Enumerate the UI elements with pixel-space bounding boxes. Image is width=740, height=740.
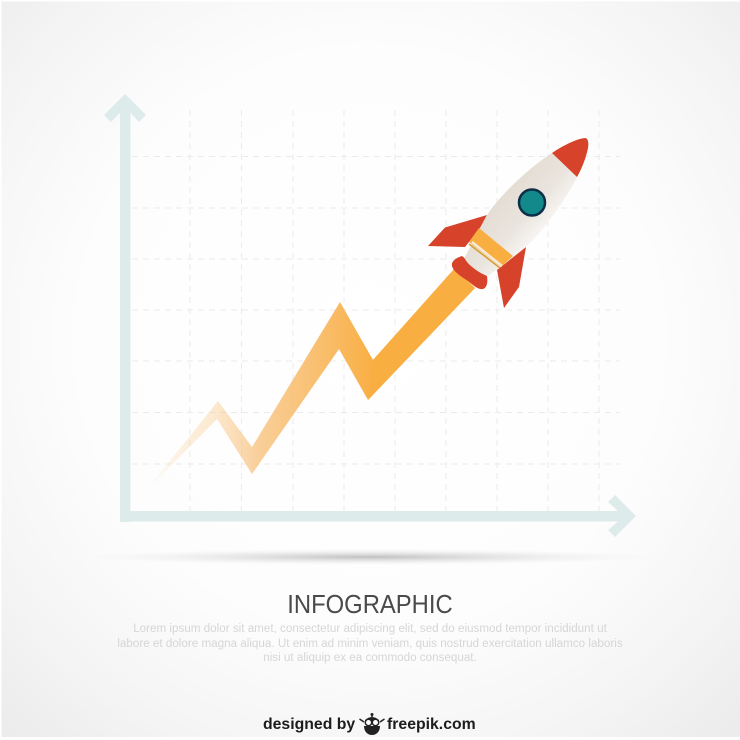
icon: freepik logo [359,713,385,735]
rocket left fin [428,215,487,247]
floor shadow [85,549,655,565]
body text: nisi ut aliquip ex ea commodo consequat. [263,651,477,664]
y axis arrow [104,94,146,522]
body text: labore et dolore magna aliqua. Ut enim ad minim veniam, quis nostrud exercitation ullamco laboris [117,637,623,650]
title: INFOGRAPHIC [287,589,453,619]
rocket nose cone [552,138,588,177]
body text: Lorem ipsum dolor sit amet, consectetur adipiscing elit, sed do eiusmod tempor incididunt ut [133,622,607,635]
chart grid [132,110,620,511]
zigzag growth line [145,268,475,492]
rocket band [469,228,513,267]
rocket [428,138,588,308]
rocket band stripes [469,242,502,268]
rocket window [519,190,545,216]
credit: freepik.com: freepik.com [387,716,476,733]
rocket nozzle [452,256,487,289]
body text [117,622,623,664]
x axis arrow [120,495,636,537]
rocket right fin [497,247,526,308]
zigzag line upper segment [368,268,475,400]
credit: designed by: designed by [263,716,355,733]
rocket body [464,153,577,276]
